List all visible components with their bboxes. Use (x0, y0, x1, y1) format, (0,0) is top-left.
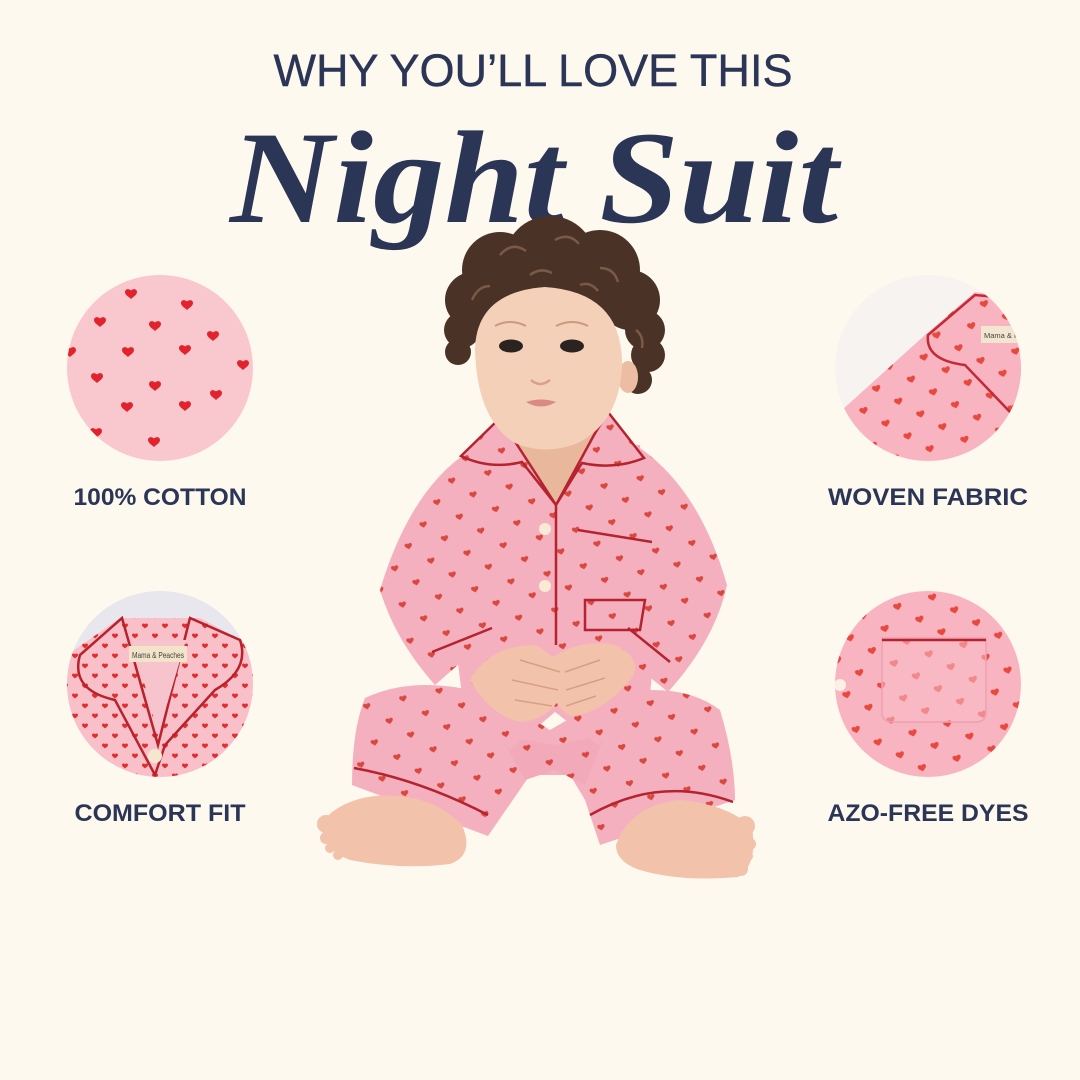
left sleeve (380, 452, 500, 685)
cuffs (432, 628, 670, 662)
right sleeve (610, 448, 727, 692)
neck and chest (505, 425, 600, 508)
heading: why you'll love this: WHY YOU’LL LOVE THIS (274, 45, 792, 96)
label: comfort fit: COMFORT FIT (74, 800, 246, 827)
shirt body (455, 445, 655, 750)
panel: woven fabric swatch (844, 292, 1021, 461)
panel: azo-free dyes swatch (835, 591, 1021, 777)
nose and mouth (526, 380, 556, 406)
ear (618, 361, 638, 393)
illustration: baby in heart-print night suit (317, 216, 756, 878)
panel: comfort fit swatch (67, 591, 253, 777)
hands (470, 643, 635, 722)
eyes (495, 322, 588, 352)
hair curls (472, 237, 642, 348)
collar (461, 412, 644, 505)
label: 100% cotton: 100% COTTON (74, 484, 246, 511)
label: woven fabric: WOVEN FABRIC (828, 484, 1028, 511)
panel: comfort fit swatch: Mama & Peaches (132, 651, 184, 660)
feet with toes (317, 796, 756, 878)
hair (444, 216, 665, 394)
panel: 100% cotton swatch (67, 275, 253, 461)
pants (352, 685, 735, 845)
label: azo-free dyes: AZO-FREE DYES (828, 800, 1028, 827)
title: night suit: Night Suit (228, 104, 842, 251)
face (475, 287, 622, 450)
pocket (578, 530, 652, 630)
panel: woven fabric swatch: Mama & Peaches (984, 331, 1043, 340)
placket and buttons (539, 505, 556, 645)
